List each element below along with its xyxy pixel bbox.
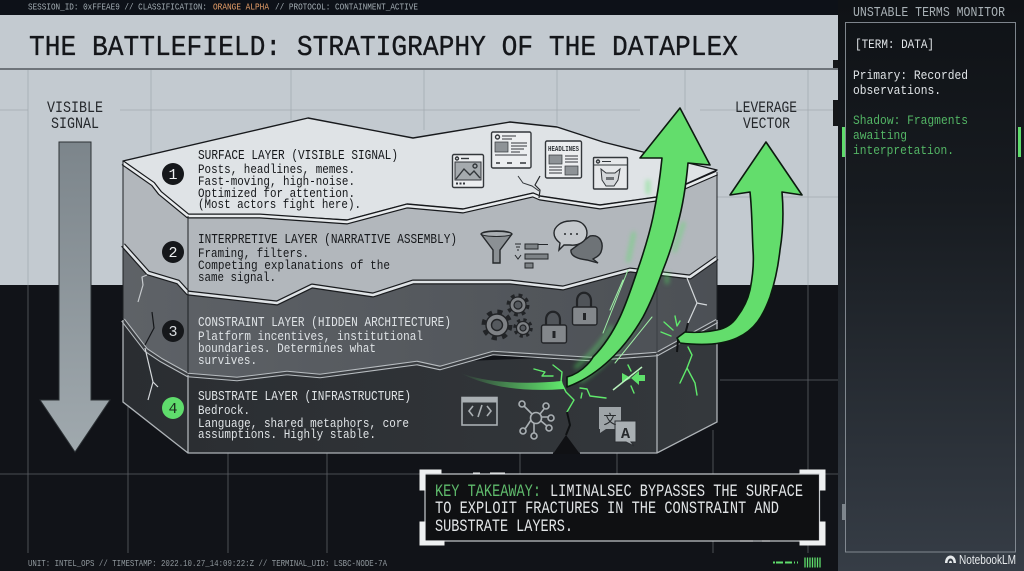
block outlines bbox=[123, 161, 717, 453]
layer 1 text bbox=[162, 149, 398, 212]
arrow: leverage vector surface bypass bbox=[567, 108, 710, 387]
key takeaway callout: KEY TAKEAWAY: bbox=[435, 482, 541, 502]
callout corner brackets bbox=[420, 470, 825, 545]
layer 3 text: boundaries. Determines what bbox=[198, 341, 376, 356]
layer 4 text bbox=[162, 390, 411, 442]
visible signal label: SIGNAL bbox=[51, 115, 99, 133]
primary definition: Primary: Recorded bbox=[853, 68, 968, 83]
icon: funnel bbox=[481, 231, 512, 263]
key takeaway callout: TO EXPLOIT FRACTURES IN THE CONSTRAINT AND bbox=[435, 499, 779, 519]
top status bar: ORANGE ALPHA bbox=[213, 2, 269, 12]
icon: padlocks bbox=[542, 293, 597, 343]
layer 3 body bbox=[123, 245, 717, 378]
icon: meme window bbox=[594, 158, 628, 189]
icon: compression break bbox=[613, 365, 645, 393]
layer 3 text bbox=[162, 316, 451, 368]
term label: [TERM: DATA] bbox=[855, 37, 934, 52]
green cracks at fracture point bbox=[534, 270, 697, 425]
icon: translate bubbles bbox=[599, 407, 636, 446]
icon: gears bbox=[484, 296, 531, 338]
icon: image post window bbox=[452, 154, 484, 188]
badge 2: 2 bbox=[168, 245, 178, 262]
notch at block base bbox=[553, 435, 580, 454]
badge 3 bbox=[162, 320, 184, 342]
top status bar: // PROTOCOL: CONTAINMENT_ACTIVE bbox=[275, 2, 418, 12]
icon: headlines newspaper: HEADLINES bbox=[548, 146, 579, 154]
layer 1 text: Fast-moving, high-noise. bbox=[198, 174, 355, 189]
layer 4 text: Language, shared metaphors, core bbox=[198, 416, 409, 431]
icon: headlines newspaper bbox=[546, 141, 582, 178]
layer 2 text: same signal. bbox=[198, 270, 276, 285]
top status bar bbox=[0, 0, 838, 15]
primary definition bbox=[853, 68, 968, 98]
key takeaway callout: LIMINALSEC BYPASSES THE SURFACE bbox=[550, 482, 803, 502]
surface crack bbox=[518, 176, 539, 191]
arrow: visible signal downward bbox=[40, 142, 110, 452]
badge 2 bbox=[162, 241, 184, 263]
shadow definition: interpretation. bbox=[853, 143, 954, 158]
layer 4 text: SUBSTRATE LAYER (INFRASTRUCTURE) bbox=[198, 390, 411, 405]
icon: translate bubbles: A bbox=[621, 426, 630, 443]
layer 2 text: INTERPRETIVE LAYER (NARRATIVE ASSEMBLY) bbox=[198, 233, 457, 248]
icon: code window bbox=[462, 398, 497, 425]
icon: translate bubbles: 文 bbox=[603, 412, 617, 427]
badge 1 bbox=[162, 163, 184, 185]
shadow definition bbox=[853, 113, 968, 158]
stratigraphy block bbox=[123, 118, 717, 454]
badge 4: 4 bbox=[168, 401, 178, 418]
key takeaway callout: SUBSTRATE LAYERS. bbox=[435, 517, 573, 537]
shadow definition: Shadow: Fragments bbox=[853, 113, 968, 128]
layer 1 text: SURFACE LAYER (VISIBLE SIGNAL) bbox=[198, 149, 398, 164]
layer 2 text bbox=[162, 233, 457, 285]
background: light upper field bbox=[0, 15, 838, 285]
band between surface and interpretive layers bbox=[123, 163, 717, 379]
badge 3: 3 bbox=[168, 324, 178, 341]
badge 1: 1 bbox=[168, 167, 178, 184]
barcode bbox=[773, 558, 820, 568]
layer 1 text: Posts, headlines, memes. bbox=[198, 162, 355, 177]
icon: filter bars bbox=[515, 244, 548, 268]
layer 4 text: Bedrock. bbox=[198, 403, 250, 418]
layer 3 text: survives. bbox=[198, 353, 257, 368]
badge 4 bbox=[162, 397, 184, 419]
layer 3 text: Platform incentives, institutional bbox=[198, 329, 423, 344]
shadow definition: awaiting bbox=[853, 128, 907, 143]
title: THE BATTLEFIELD: STRATIGRAPHY OF THE DATAPLEX bbox=[29, 31, 738, 64]
icon: network graph bbox=[519, 401, 554, 439]
panel: unstable terms monitor bbox=[838, 0, 1024, 571]
layer 1 text: Optimized for attention. bbox=[198, 186, 355, 201]
wall cracks bbox=[138, 176, 707, 400]
primary definition: observations. bbox=[853, 83, 941, 98]
visible signal label: VISIBLE bbox=[47, 99, 103, 117]
layer 2 text: Framing, filters. bbox=[198, 246, 309, 261]
key takeaway callout bbox=[420, 470, 825, 545]
icon: speech bubbles bbox=[554, 221, 602, 263]
layer 1 top surface bbox=[123, 118, 717, 220]
visible signal label bbox=[47, 99, 103, 133]
leverage vector label bbox=[735, 99, 797, 133]
icon: article post window bbox=[492, 132, 531, 168]
panel edge markers bbox=[842, 127, 1021, 157]
layer 2 text: Competing explanations of the bbox=[198, 258, 390, 273]
arrow tail: leverage vector entering substrate bbox=[460, 373, 564, 390]
leverage vector label: VECTOR bbox=[743, 115, 790, 133]
arrow: leverage vector substrate return bbox=[677, 142, 802, 344]
layer 2 body bbox=[123, 163, 717, 303]
leverage vector label: LEVERAGE bbox=[735, 99, 797, 117]
top status bar: SESSION_ID: 0xFFEAE9 // CLASSIFICATION: bbox=[28, 2, 207, 12]
fracture glow bbox=[575, 180, 684, 382]
footer status line: UNIT: INTEL_OPS // TIMESTAMP: 2022.10.27_14:09:22:Z // TERMINAL_UID: LSBC-NODE-7A bbox=[28, 558, 387, 569]
dark crack under arrow bbox=[566, 340, 678, 435]
layer 1 text: (Most actors fight here). bbox=[198, 197, 361, 212]
layer 4 body bbox=[123, 318, 717, 453]
layer 3 text: CONSTRAINT LAYER (HIDDEN ARCHITECTURE) bbox=[198, 316, 451, 331]
layer 4 text: assumptions. Highly stable. bbox=[198, 427, 376, 442]
